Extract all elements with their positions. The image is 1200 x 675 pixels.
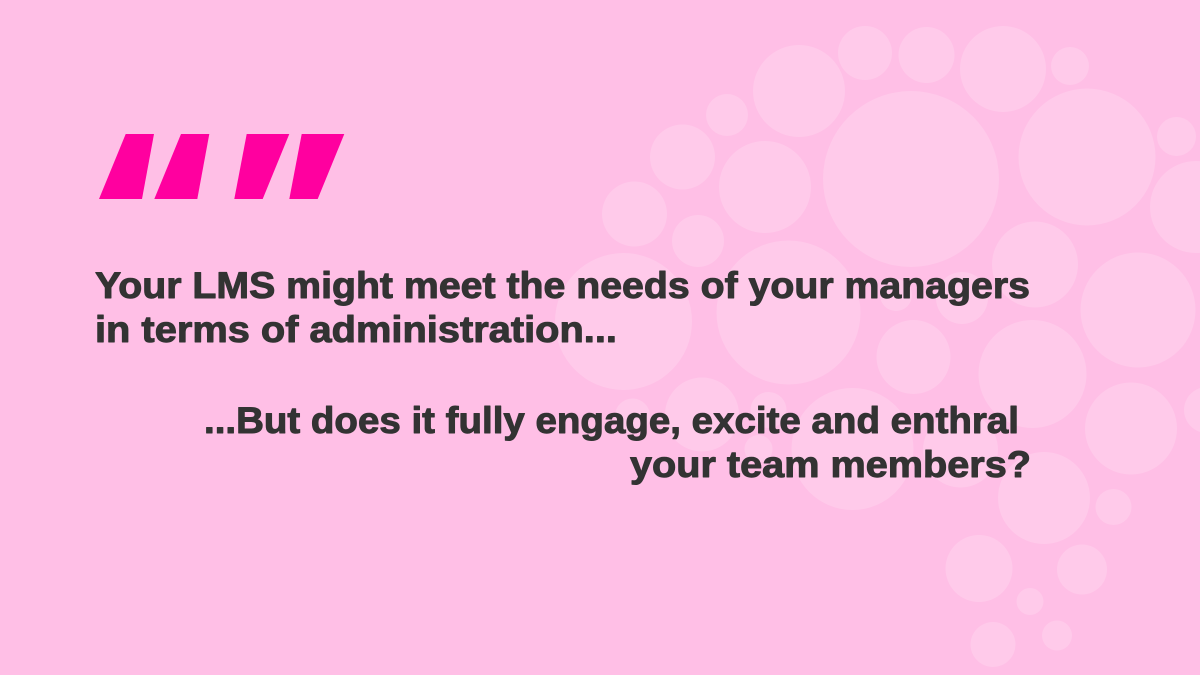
quote part two, right aligned: your team members? xyxy=(630,444,1031,485)
quote part one, left aligned: in terms of administration... xyxy=(95,309,617,350)
quote part two, right aligned: ...But does it fully engage, excite and enthral xyxy=(204,400,1019,441)
quote part two, right aligned xyxy=(204,400,1031,485)
quote part one, left aligned: Your LMS might meet the needs of your managers xyxy=(95,265,1030,306)
quote part one, left aligned xyxy=(95,265,1030,350)
decorative bubble cluster xyxy=(555,26,1200,667)
icon: quotation marks xyxy=(99,134,344,199)
